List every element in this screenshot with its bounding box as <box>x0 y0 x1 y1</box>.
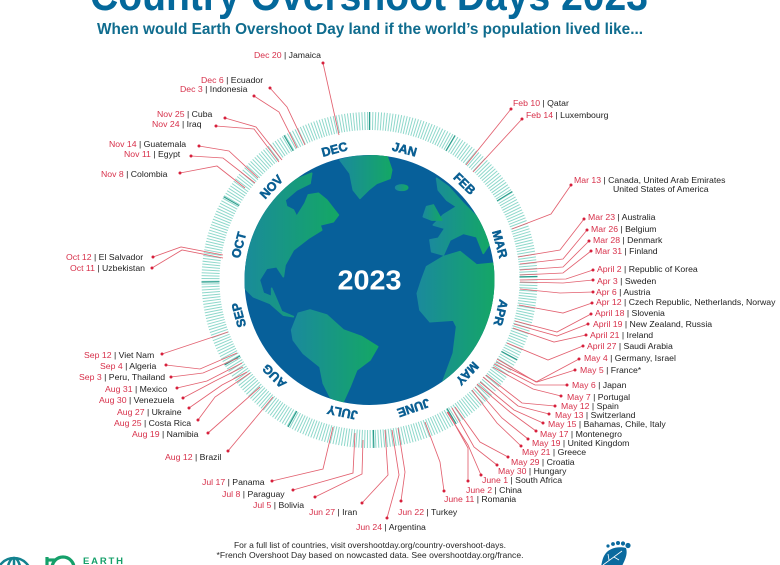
label: May 4 Germany, Israel <box>497 353 676 382</box>
label: Mar 31 Finland <box>520 246 658 275</box>
label: Jun 22 Turkey <box>398 428 458 517</box>
label: Mar 23 Australia <box>518 212 656 257</box>
label: Jun 24 Argentina: Jun 24 | Argentina <box>356 522 426 532</box>
label: Oct 12 El Salvador: Oct 12 | El Salvador <box>66 252 143 262</box>
label: Aug 19 Namibia <box>132 387 260 439</box>
label: Nov 8 Colombia <box>101 166 245 188</box>
label: May 13 Switzerland <box>483 377 636 420</box>
label: May 15 Bahamas, Chile, Italy: May 15 | Bahamas, Chile, Italy <box>548 419 666 429</box>
continent: Greenland <box>340 155 392 198</box>
footnote: For a full list of countries, visit overshootday.org/country-overshoot-days. <box>234 540 506 550</box>
label: Aug 12 Brazil <box>165 397 273 462</box>
label: May 17 Montenegro <box>477 384 622 439</box>
footnote <box>216 540 524 560</box>
label: Jun 27 Iran: Jun 27 | Iran <box>309 507 357 517</box>
label: Sep 3 Peru, Thailand <box>79 358 238 382</box>
label: Sep 12 Viet Nam <box>84 332 228 360</box>
calendar tick ring <box>202 112 537 448</box>
label: May 17 Montenegro: May 17 | Montenegro <box>540 429 622 439</box>
label: Dec 3 Indonesia: Dec 3 | Indonesia <box>180 84 248 94</box>
month labels <box>229 139 510 422</box>
label: Apr 6 Austria <box>520 287 651 297</box>
label: Aug 27 Ukraine: Aug 27 | Ukraine <box>117 407 182 417</box>
label: Feb 14 Luxembourg <box>473 110 609 172</box>
label: Jul 8 Paraguay <box>222 433 355 499</box>
label: Jul 8 Paraguay: Jul 8 | Paraguay <box>222 489 285 499</box>
label: May 21 Greece: May 21 | Greece <box>522 447 586 457</box>
label: Dec 6 Ecuador: Dec 6 | Ecuador <box>201 75 263 85</box>
footnote: *French Overshoot Day based on nowcasted data. See overshootday.org/france. <box>216 550 524 560</box>
label: Mar 28 Denmark: Mar 28 | Denmark <box>593 235 663 245</box>
label: Mar 13 Canada, UAE, USA: United States of America <box>613 184 709 194</box>
label: Apr 3 Sweden: Apr 3 | Sweden <box>597 276 656 286</box>
logo: globe icon <box>0 558 31 565</box>
continent: South America <box>292 310 378 405</box>
label: Nov 25 Cuba: Nov 25 | Cuba <box>157 109 213 119</box>
month labels: AUG <box>260 361 289 391</box>
month labels: MAY <box>452 359 481 388</box>
year label: 2023 <box>338 264 402 296</box>
month labels: JULY <box>325 402 359 422</box>
label: Mar 26 Belgium <box>520 224 657 264</box>
globe <box>240 155 497 405</box>
label: Jul 17 Panama: Jul 17 | Panama <box>202 477 265 487</box>
label: Aug 19 Namibia: Aug 19 | Namibia <box>132 429 199 439</box>
label: Aug 30 Venezuela: Aug 30 | Venezuela <box>99 395 174 405</box>
label: May 29 Croatia <box>455 407 575 467</box>
label: Nov 24 Iraq: Nov 24 | Iraq <box>152 119 202 129</box>
label: April 18 Slovenia <box>515 308 665 332</box>
label: April 2 Republic of Korea: April 2 | Republic of Korea <box>597 264 698 274</box>
logo: footprint leaf <box>601 541 631 565</box>
label: Aug 30 Venezuela <box>99 367 243 405</box>
label: May 30 Hungary <box>452 408 567 476</box>
month labels: NOV <box>257 172 286 202</box>
month labels: SEP <box>229 301 249 329</box>
label: Jun 27 Iran <box>309 430 388 517</box>
logo: Earth Day anniversary mark <box>47 557 74 565</box>
label: Dec 20 Jamaica <box>254 50 339 135</box>
label: May 30 Hungary: May 30 | Hungary <box>498 466 567 476</box>
label: Nov 14 Guatemala: Nov 14 | Guatemala <box>109 139 186 149</box>
label: Feb 10 Qatar: Feb 10 | Qatar <box>513 98 569 108</box>
label: May 4 Germany, Israel: May 4 | Germany, Israel <box>584 353 676 363</box>
label: May 5 France: May 5 | France* <box>580 365 642 375</box>
label: April 21 Ireland: April 21 | Ireland <box>590 330 653 340</box>
label: Dec 20 Jamaica: Dec 20 | Jamaica <box>254 50 321 60</box>
label: June 1 South Africa: June 1 | South Africa <box>482 475 562 485</box>
label: Aug 12 Brazil: Aug 12 | Brazil <box>165 452 221 462</box>
label: Aug 31 Mexico: Aug 31 | Mexico <box>105 384 167 394</box>
label: Aug 25 Costa Rica <box>114 373 250 428</box>
month labels: MAR <box>489 229 510 260</box>
label: Sep 3 Peru, Thailand: Sep 3 | Peru, Thailand <box>79 372 165 382</box>
continent: North America <box>240 173 338 317</box>
label: Dec 3 Indonesia <box>180 84 297 148</box>
label: May 15 Bahamas, Chile, Italy <box>480 382 666 429</box>
label: Apr 12 Czech Republic, Netherlands, Norway: Apr 12 | Czech Republic, Netherlands, Norway <box>596 297 776 307</box>
label: April 19 New Zealand, Russia: April 19 | New Zealand, Russia <box>593 319 712 329</box>
label: Mar 26 Belgium: Mar 26 | Belgium <box>591 224 657 234</box>
label: May 21 Greece <box>472 390 586 457</box>
label: Mar 23 Australia: Mar 23 | Australia <box>588 212 656 222</box>
label: May 6 Japan <box>494 364 627 390</box>
label: Sep 4 Algeria: Sep 4 | Algeria <box>100 361 157 371</box>
month labels: JUNE <box>395 396 431 420</box>
label: April 27 Saudi Arabia: April 27 | Saudi Arabia <box>587 341 673 351</box>
month labels: OCT <box>229 230 249 260</box>
label: May 6 Japan: May 6 | Japan <box>572 380 627 390</box>
label: Mar 31 Finland: Mar 31 | Finland <box>595 246 658 256</box>
label: June 2 China <box>448 412 522 495</box>
label: Apr 12 Czech Republic, Netherlands, Norway <box>519 297 776 313</box>
subtitle: When would Earth Overshoot Day land if the world’s population lived like... <box>97 21 643 38</box>
label: Nov 11 Egypt: Nov 11 | Egypt <box>124 149 181 159</box>
label: April 19 New Zealand, Russia <box>514 319 712 336</box>
label: Jun 24 Argentina <box>356 430 426 532</box>
label: June 2 China: June 2 | China <box>466 485 522 495</box>
label: Aug 31 Mexico <box>105 363 242 394</box>
label: Nov 11 Egypt <box>124 149 255 183</box>
label: Nov 14 Guatemala <box>109 139 258 178</box>
continent: British Isles <box>423 205 442 220</box>
label: Oct 11 Uzbekistan: Oct 11 | Uzbekistan <box>70 263 145 273</box>
label: Apr 6 Austria: Apr 6 | Austria <box>596 287 651 297</box>
label: June 11 Romania <box>425 422 516 504</box>
label: Jul 17 Panama <box>202 427 333 487</box>
label: Feb 10 Qatar <box>466 98 569 165</box>
continent: Iceland <box>396 185 408 190</box>
label: Mar 28 Denmark <box>520 235 663 270</box>
label: April 21 Ireland <box>513 328 653 342</box>
label: May 12 Spain <box>486 375 619 411</box>
month labels: JAN <box>391 140 418 160</box>
label: Mar 13 Canada, UAE, USA: Mar 13 | Canada, United Arab Emirates <box>574 175 726 185</box>
label: May 7 Portugal: May 7 | Portugal <box>567 392 630 402</box>
month labels: FEB <box>450 170 478 198</box>
label: May 7 Portugal <box>493 367 630 402</box>
continent: Europe <box>430 178 490 255</box>
label: Dec 6 Ecuador <box>201 75 305 145</box>
label: Oct 12 El Salvador <box>66 247 223 262</box>
label: June 11 Romania: June 11 | Romania <box>444 494 516 504</box>
label: May 29 Croatia: May 29 | Croatia <box>511 457 575 467</box>
label: Aug 25 Costa Rica: Aug 25 | Costa Rica <box>114 418 191 428</box>
label: Apr 3 Sweden <box>520 276 656 286</box>
month labels: APR <box>491 298 510 327</box>
label: April 18 Slovenia: April 18 | Slovenia <box>595 308 665 318</box>
label: May 13 Switzerland: May 13 | Switzerland <box>555 410 636 420</box>
label: May 19 United Kingdom: May 19 | United Kingdom <box>532 438 629 448</box>
label: Mar 13 Canada, UAE, USA <box>512 175 726 229</box>
label: Sep 12 Viet Nam: Sep 12 | Viet Nam <box>84 350 154 360</box>
label: May 5 France <box>496 362 642 382</box>
label: May 19 United Kingdom <box>475 387 629 448</box>
label: June 1 South Africa <box>447 412 562 485</box>
label: Feb 14 Luxembourg: Feb 14 | Luxembourg <box>526 110 609 120</box>
label: Jul 5 Bolivia <box>253 440 363 510</box>
label: Jul 5 Bolivia: Jul 5 | Bolivia <box>253 500 304 510</box>
month labels: DEC <box>320 139 349 160</box>
label: April 2 Republic of Korea <box>520 264 698 280</box>
label: May 12 Spain: May 12 | Spain <box>561 401 619 411</box>
label: Aug 27 Ukraine <box>117 372 247 417</box>
label: Oct 11 Uzbekistan <box>70 250 223 273</box>
continent: Africa <box>417 252 497 385</box>
label: Nov 8 Colombia: Nov 8 | Colombia <box>101 169 168 179</box>
label: Jun 22 Turkey: Jun 22 | Turkey <box>398 507 458 517</box>
label: Nov 24 Iraq <box>152 119 279 162</box>
label: Sep 4 Algeria <box>100 353 237 371</box>
label: Nov 25 Cuba <box>157 109 282 160</box>
label: April 27 Saudi Arabia <box>507 341 673 360</box>
